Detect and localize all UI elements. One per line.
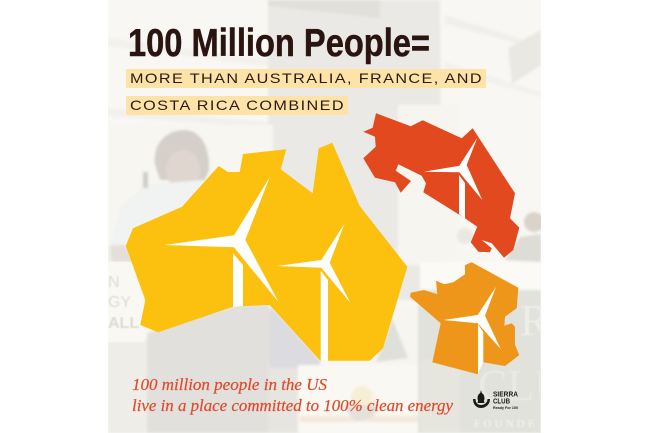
caption: 100 million people statement: 100 million people in the US	[132, 375, 327, 394]
subheading: highlighted lines	[126, 69, 486, 115]
background sign lettering: CLU	[478, 361, 566, 410]
logo: Sierra Club Ready For 100: Ready For 100	[493, 406, 518, 410]
caption: 100 million people statement	[132, 375, 453, 415]
panel: washed-out background photo of speaker at podium	[108, 0, 566, 433]
background sign lettering: GY	[108, 294, 131, 311]
background sign lettering	[108, 276, 540, 427]
subheading: highlighted lines: COSTA RICA COMBINED	[130, 99, 344, 114]
solar panel	[270, 305, 320, 368]
icon: large wind turbine	[165, 177, 279, 307]
logo: Sierra Club Ready For 100	[473, 390, 519, 410]
map: Australia with two wind turbines	[126, 143, 407, 361]
lower-left legs	[108, 340, 150, 433]
infographic canvas	[108, 0, 541, 433]
map: Costa Rica with wind turbine	[363, 113, 519, 258]
background sign lettering: N	[108, 274, 120, 291]
background sign lettering: R	[520, 296, 550, 345]
building facade shadows	[268, 0, 442, 300]
podium	[147, 305, 272, 433]
subheading: highlighted lines: MORE THAN AUSTRALIA, FRANCE, AND	[130, 72, 482, 87]
heading: 100 Million People=: 100 Million People=	[128, 22, 430, 65]
white table	[298, 364, 321, 369]
icon: France wind turbine	[443, 287, 501, 374]
background sign lettering: ALL	[108, 315, 139, 332]
icon: small wind turbine	[277, 223, 350, 361]
speaker	[155, 130, 209, 180]
right banner	[420, 264, 442, 290]
caption: 100 million people statement: live in a place committed to 100% clean energy	[132, 396, 453, 415]
logo: Sierra Club Ready For 100: SIERRA	[493, 390, 519, 398]
white stone slab behind speaker	[268, 126, 272, 151]
logo: Sierra Club Ready For 100: CLUB	[493, 396, 510, 406]
map: France with wind turbine	[410, 262, 519, 374]
background sign lettering: FOUNDE	[474, 418, 538, 430]
icon: Costa Rica wind turbine	[424, 138, 482, 218]
